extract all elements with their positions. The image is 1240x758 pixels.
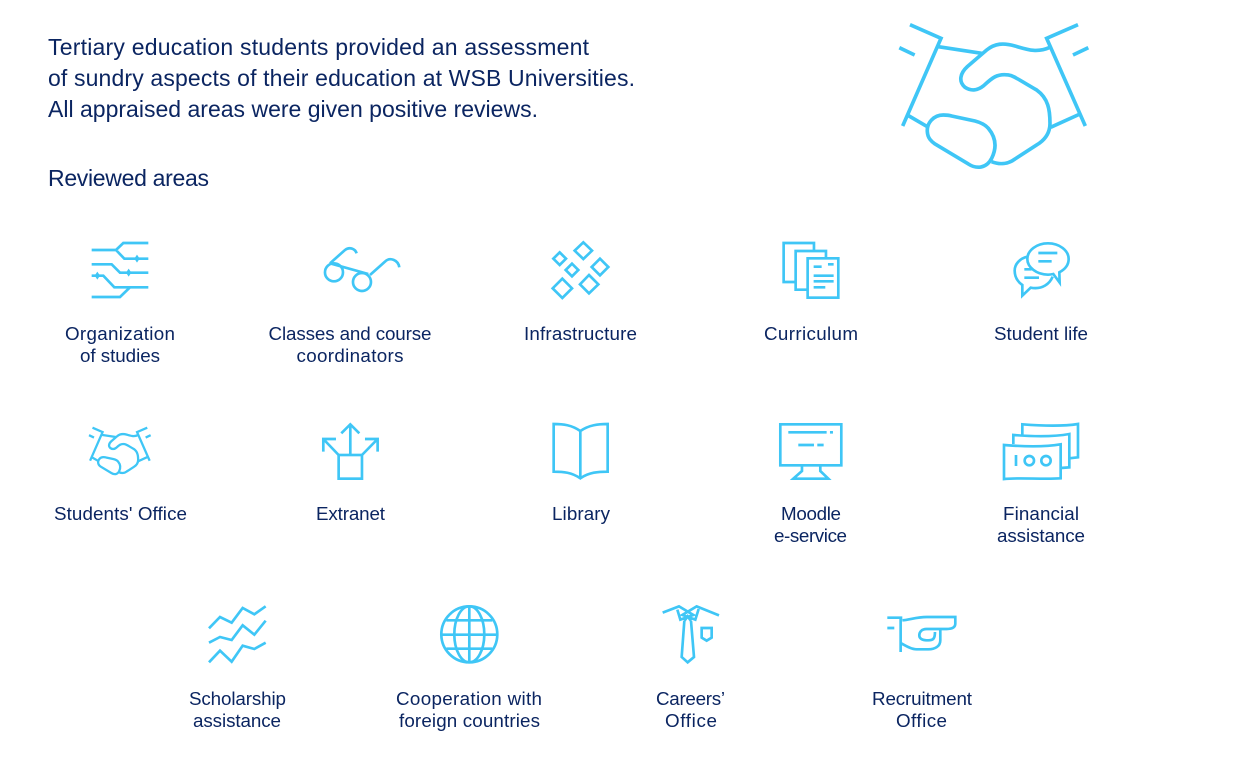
icon: diamonds [553,242,608,298]
intro text [48,34,635,122]
label: e-service [774,525,847,546]
label: Students' Office [54,503,187,524]
icon: documents [784,243,838,298]
label [656,688,725,731]
label: Classes and course [268,323,432,344]
label: Office [896,710,947,731]
label: Organization [65,323,175,344]
label: of studies [80,345,160,366]
item: organization of studies [65,243,175,366]
icon: branching lines [92,243,148,297]
item: careers' office [656,606,725,731]
icon: banknotes [1004,424,1078,479]
icon: small handshake [89,428,151,474]
intro text: of sundry aspects of their education at WSB Universities. [48,65,635,91]
label: Extranet [316,503,386,524]
item: financial assistance [997,424,1085,546]
item: curriculum [764,243,858,344]
label: Student life [994,323,1088,344]
label [396,688,542,731]
label [268,323,432,366]
label [189,688,286,731]
label: assistance [193,710,281,731]
intro text: All appraised areas were given positive reviews. [48,96,538,122]
label: Curriculum [764,323,858,344]
item: cooperation with foreign countries [396,606,542,731]
label: Cooperation with [396,688,542,709]
label [774,503,847,546]
item: student life [994,243,1088,344]
label: assistance [997,525,1085,546]
icon: zigzag lines [209,606,266,662]
label: Scholarship [189,688,286,709]
intro text: Tertiary education students provided an assessment [48,34,590,60]
label: foreign countries [399,710,540,731]
icon: glasses [325,248,399,291]
label: Moodle [781,503,841,524]
icon: open book [554,424,608,478]
icon: globe [441,606,497,662]
item: extranet [316,424,386,524]
icon: shirt collar and tie [663,606,719,662]
label [997,503,1085,546]
item: moodle e-service [774,424,847,546]
item: recruitment office [872,617,973,731]
label: Financial [1003,503,1079,524]
label: coordinators [296,345,404,366]
icon: speech bubbles [1015,243,1069,296]
icon: pointing hand [887,617,955,652]
label: Recruitment [872,688,973,709]
item: classes and course coordinators [268,248,432,366]
icon: large handshake [899,25,1088,167]
icon: monitor [780,424,841,479]
label: Infrastructure [524,323,637,344]
label [872,688,973,731]
label: Office [665,710,717,731]
label: Careers’ [656,688,725,709]
item: infrastructure [524,242,637,344]
item: students' office [54,428,187,524]
heading: reviewed areas: Reviewed areas [48,165,209,191]
icon: box with arrows [323,424,378,479]
label: Library [552,503,611,524]
item: library [552,424,611,524]
label [65,323,175,366]
item: scholarship assistance [189,606,286,731]
